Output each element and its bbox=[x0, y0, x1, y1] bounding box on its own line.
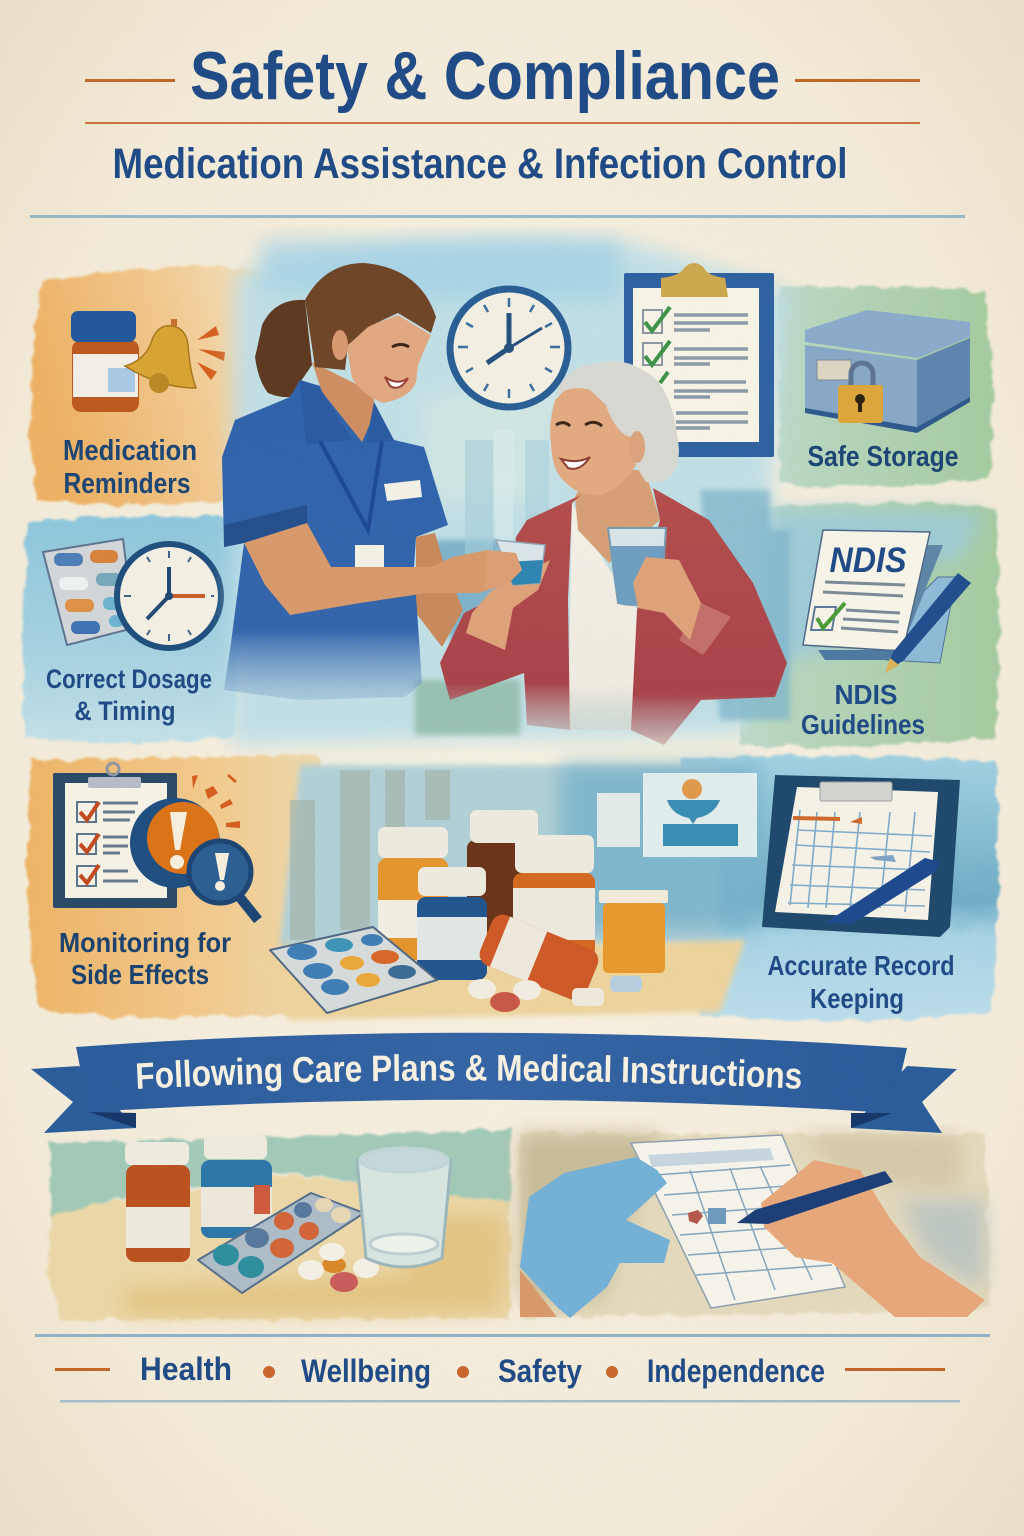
icon: blister pack bbox=[43, 539, 134, 645]
footer values: Health bbox=[140, 1351, 232, 1387]
gloved hand bbox=[520, 1157, 670, 1318]
row three monitoring icons bbox=[53, 763, 258, 920]
monitoring label: Side Effects bbox=[71, 959, 209, 990]
cup and hands bbox=[466, 540, 550, 650]
icon: document with pen: NDIS bbox=[830, 541, 906, 580]
eyes and smile bbox=[556, 422, 602, 426]
banner bbox=[31, 1032, 957, 1133]
wall picture bbox=[597, 773, 757, 857]
writing hand bbox=[761, 1160, 985, 1317]
label: Medication bbox=[63, 435, 197, 467]
record keeping clipboard bbox=[762, 775, 960, 937]
panel: correct dosage and timing bbox=[22, 516, 245, 743]
chart paper bbox=[631, 1135, 845, 1308]
bottom left scene bbox=[48, 1130, 510, 1320]
clipboard checklist bbox=[624, 263, 774, 457]
pen bbox=[737, 1171, 893, 1224]
label: Reminders bbox=[64, 468, 190, 500]
bottom right scene bbox=[520, 1134, 990, 1318]
label bbox=[63, 435, 197, 500]
label: & Timing bbox=[74, 696, 176, 726]
label bbox=[801, 679, 925, 740]
glass bbox=[608, 528, 666, 605]
banner: Following Care Plans & Medical Instructions bbox=[136, 1054, 801, 1092]
icon: lock box bbox=[805, 310, 970, 433]
record keeping label bbox=[768, 950, 954, 1014]
icon: document with pen bbox=[803, 530, 971, 673]
cardigan left bbox=[440, 495, 581, 730]
label bbox=[46, 664, 212, 726]
bottles bbox=[126, 1165, 190, 1262]
wall clock bbox=[450, 289, 568, 407]
alert rays bbox=[192, 774, 240, 828]
medication bottles bbox=[270, 810, 668, 1013]
loose pills bbox=[468, 979, 496, 999]
collars bbox=[300, 380, 394, 444]
senior woman bbox=[440, 361, 787, 745]
blister pack bbox=[198, 1193, 364, 1293]
footer values: Wellbeing bbox=[301, 1353, 431, 1389]
panel: safe storage bbox=[778, 286, 993, 487]
neck and chest bbox=[575, 470, 660, 563]
ponytail bbox=[255, 300, 312, 397]
icon: clock bbox=[117, 544, 221, 648]
record keeping label: Keeping bbox=[810, 983, 904, 1014]
right forearm cuff bbox=[679, 603, 731, 655]
face bbox=[550, 385, 650, 495]
panel: row three background bbox=[27, 755, 998, 1021]
arm bbox=[244, 523, 520, 615]
nurse bbox=[222, 263, 520, 700]
title: Safety & Compliance bbox=[190, 38, 780, 114]
ear bbox=[332, 330, 348, 360]
footer values: Independence bbox=[647, 1353, 825, 1389]
label: NDIS bbox=[834, 679, 898, 710]
neck bbox=[312, 362, 376, 442]
label: Safe Storage bbox=[808, 441, 958, 473]
alert circle bbox=[130, 798, 220, 888]
hair bbox=[555, 361, 679, 482]
hand bbox=[633, 557, 701, 640]
icon: medicine bottle bbox=[71, 311, 139, 412]
panel: NDIS guidelines bbox=[740, 503, 999, 746]
label: Guidelines bbox=[801, 709, 925, 740]
banner right tail bbox=[851, 1066, 957, 1133]
blister pack bbox=[270, 927, 437, 1013]
footer values: Safety bbox=[498, 1353, 582, 1389]
hair bbox=[305, 263, 436, 370]
white shirt bbox=[568, 503, 637, 730]
subtitle: Medication Assistance & Infection Control bbox=[112, 140, 848, 188]
panel: medication reminders bbox=[30, 268, 262, 505]
eyes and smile bbox=[392, 344, 409, 347]
central watercolor wash bbox=[230, 239, 790, 745]
icon: bell bbox=[125, 319, 225, 393]
monitoring label bbox=[59, 927, 231, 990]
lanyard and badge bbox=[320, 441, 382, 530]
magnifier bbox=[238, 895, 258, 920]
left arm behind bbox=[416, 533, 463, 647]
footer values bbox=[35, 1334, 990, 1402]
label: Correct Dosage bbox=[46, 664, 212, 694]
banner left tail bbox=[31, 1066, 136, 1133]
shirt shading bbox=[224, 505, 307, 547]
cardigan right bbox=[631, 488, 787, 745]
record keeping label: Accurate Record bbox=[768, 950, 954, 981]
torso bbox=[222, 380, 448, 700]
wrist bbox=[520, 1270, 557, 1317]
ear bbox=[629, 431, 645, 463]
face bbox=[345, 315, 431, 403]
clipboard bbox=[53, 773, 177, 908]
monitoring label: Monitoring for bbox=[59, 927, 231, 958]
glass of water bbox=[357, 1151, 451, 1267]
